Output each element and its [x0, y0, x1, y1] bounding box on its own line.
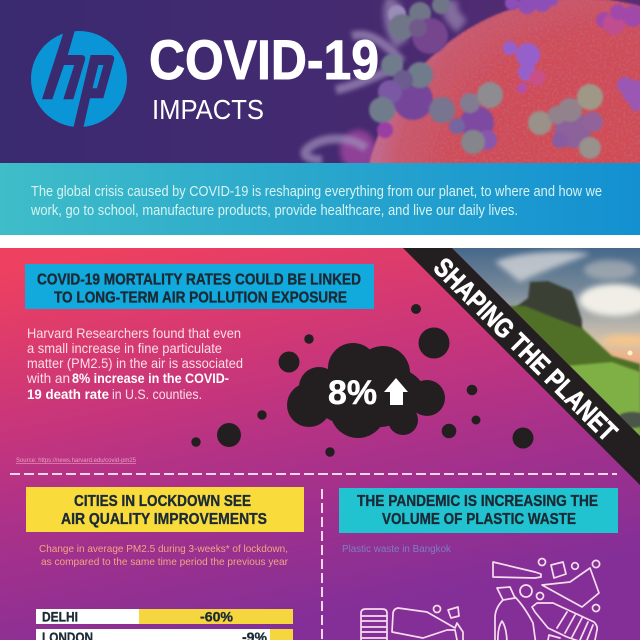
icon: debris shard	[542, 568, 599, 607]
panel: mortality heading	[25, 264, 374, 309]
spike cluster D	[528, 84, 603, 159]
landscape photo	[450, 248, 640, 440]
panel: plastic waste heading: THE PANDEMIC IS INCREASING THE	[357, 493, 598, 510]
pollution particles	[191, 304, 534, 457]
spike cluster E	[503, 41, 545, 93]
title: COVID-19	[149, 28, 379, 91]
icon: debris circles	[434, 558, 600, 612]
source note: Source: https://news.harvard.edu/covid-pm25	[16, 458, 137, 464]
cloud stat: 8% increase: 8%	[328, 374, 377, 412]
text block: Harvard finding: Harvard Researchers found that even	[27, 325, 241, 341]
text block: PM2.5 description: as compared to the same time period the previous year	[41, 556, 288, 568]
icon: debris square	[551, 562, 566, 578]
spike cluster H	[617, 77, 640, 111]
text block: PM2.5 description	[39, 543, 288, 568]
icon: ribbed cup	[361, 609, 387, 640]
text block: Harvard finding: 19 death rate	[27, 386, 109, 402]
header banner	[0, 0, 640, 163]
panel: mortality heading: TO LONG-TERM AIR POLLUTION EXPOSURE	[54, 290, 347, 306]
text block: Harvard finding: 8% increase in the COVID-	[72, 370, 229, 386]
bar: Delhi: -60%	[200, 610, 233, 624]
virus illustration	[298, 0, 640, 163]
intro band	[0, 163, 640, 235]
icon: jug	[495, 587, 536, 640]
spike cluster A	[388, 0, 450, 54]
divider	[10, 473, 617, 475]
icon: small square	[448, 607, 459, 618]
main gradient panel	[0, 248, 640, 640]
panel: air quality heading	[26, 487, 304, 532]
intro text	[30, 184, 602, 219]
icon: crushed bottle	[392, 608, 463, 640]
panel: air quality heading: AIR QUALITY IMPROVEMENTS	[61, 511, 267, 528]
cloud stat: 8% increase	[287, 343, 445, 438]
intro text: work, go to school, manufacture products, provide healthcare, and live our daily lives.	[30, 203, 518, 219]
text block: Harvard finding	[26, 325, 243, 402]
bar: Delhi: DELHI	[42, 610, 78, 624]
text block: PM2.5 description: Change in average PM2.5 during 3-weeks* of lockdown,	[39, 543, 288, 555]
subtitle: IMPACTS	[152, 94, 264, 125]
spike cluster F	[505, 0, 558, 14]
bar: London	[36, 629, 293, 640]
text block: Harvard finding: with an	[26, 370, 70, 386]
panel: mortality heading: COVID-19 MORTALITY RATES COULD BE LINKED	[37, 272, 361, 288]
bar: Delhi	[36, 609, 293, 624]
HP logo	[31, 30, 127, 128]
icon: tube	[493, 562, 541, 578]
text block: Harvard finding: matter (PM2.5) in the air is associated	[27, 355, 243, 371]
panel: air quality heading: CITIES IN LOCKDOWN SEE	[74, 493, 251, 510]
panel: plastic waste heading: VOLUME OF PLASTIC WASTE	[382, 511, 576, 528]
text block: Harvard finding: a small increase in fine particulate	[27, 340, 222, 356]
spike cluster G	[596, 4, 640, 35]
panel: plastic waste heading	[339, 488, 618, 533]
spike cluster C	[429, 82, 503, 154]
caption: Bangkok: Plastic waste in Bangkok	[342, 543, 452, 555]
text block: Harvard finding: in U.S. counties.	[112, 386, 202, 402]
spike cluster B	[369, 54, 433, 138]
icon: water bottle	[532, 603, 597, 640]
bar chart: city PM2.5 change	[36, 609, 293, 640]
icons: plastic waste	[361, 558, 600, 640]
